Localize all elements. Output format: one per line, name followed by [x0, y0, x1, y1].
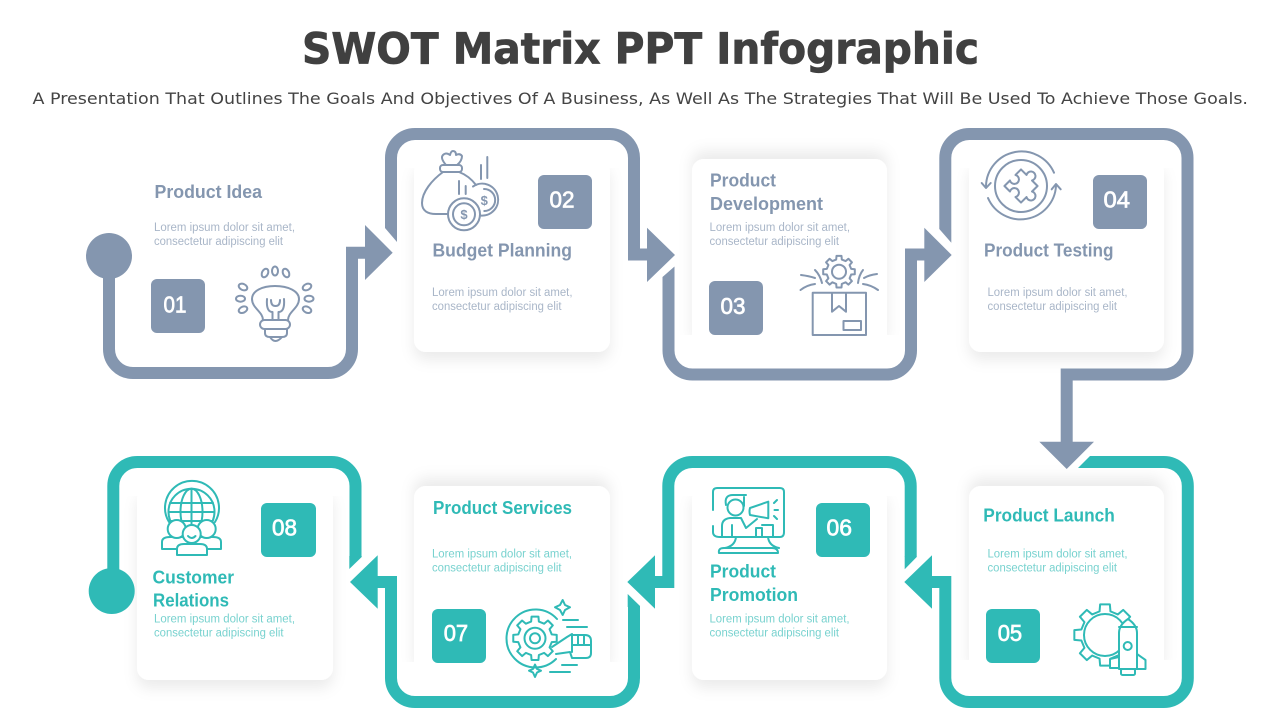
description 04: consectetur adipiscing elit	[988, 301, 1118, 313]
number badge 01: 01	[164, 292, 186, 318]
panel: step 04 Product Testing	[939, 134, 1188, 469]
icon: money bag and coins	[422, 151, 498, 230]
icon: globe with people	[162, 481, 221, 555]
description 07	[432, 549, 572, 575]
number badge 07	[432, 609, 486, 663]
description 02	[432, 287, 572, 313]
description 06: Lorem ipsum dolor sit amet,	[710, 614, 850, 626]
panel: step 08 Customer Relations	[89, 462, 362, 680]
number badge 03	[709, 281, 763, 335]
number badge 02: 02	[550, 187, 574, 213]
arrow 07	[350, 555, 378, 609]
card 08	[137, 487, 333, 680]
icon: gear with rocket	[1074, 604, 1146, 675]
number badge 06: 06	[826, 515, 852, 541]
description 05: consectetur adipiscing elit	[988, 563, 1118, 575]
connector track 04	[939, 134, 1188, 442]
connector track 05	[931, 456, 1188, 702]
heading 03	[710, 171, 823, 214]
description 08: consectetur adipiscing elit	[154, 628, 284, 640]
card 01	[137, 159, 333, 352]
heading 06: Product	[710, 562, 776, 582]
subtitle: A Presentation That Outlines The Goals And Objectives Of A Business, As Well As The Strategies That Will Be Used To Achieve Those Goals.	[32, 89, 1248, 108]
description 07: Lorem ipsum dolor sit amet,	[432, 549, 572, 561]
heading 05: Product Launch	[983, 506, 1115, 526]
title: SWOT Matrix PPT Infographic	[302, 24, 979, 74]
card 03	[692, 159, 887, 352]
icon: light bulb	[236, 266, 314, 341]
number badge 08	[261, 503, 316, 557]
heading 01: Product Idea	[154, 182, 263, 202]
heading 08: Customer	[152, 567, 234, 587]
heading 07: Product Services	[433, 498, 572, 518]
description 04	[988, 287, 1128, 313]
description 05	[988, 549, 1128, 575]
description 06	[710, 614, 850, 640]
description 08: Lorem ipsum dolor sit amet,	[154, 614, 295, 626]
description 06: consectetur adipiscing elit	[710, 628, 840, 640]
connector track 02	[385, 134, 648, 254]
arrow 06	[627, 555, 655, 609]
description 03: Lorem ipsum dolor sit amet,	[710, 222, 850, 234]
number badge 02	[538, 175, 592, 229]
arrow 03	[924, 228, 952, 282]
number badge 03: 03	[720, 293, 746, 319]
heading 03: Product	[710, 171, 776, 191]
arrow 05	[904, 555, 932, 609]
heading 06	[710, 562, 798, 605]
arrow 04	[1039, 442, 1094, 469]
card 07	[414, 486, 610, 679]
card 02	[414, 160, 610, 352]
number badge 04: 04	[1104, 187, 1130, 213]
panel: step 01 Product Idea	[86, 159, 393, 373]
description 03: consectetur adipiscing elit	[710, 236, 840, 248]
panel: step 03 Product Development	[662, 159, 952, 374]
panel: step 07 Product Services	[350, 486, 640, 702]
heading 03: Development	[710, 194, 823, 214]
icon: box with gear	[800, 256, 878, 335]
connector track 07	[377, 582, 640, 702]
card 04	[969, 160, 1164, 352]
icon: puzzle piece with cycle arrows	[982, 151, 1061, 219]
arrow 02	[647, 228, 675, 282]
panel: step 05 Product Launch	[904, 456, 1188, 702]
heading 08: Relations	[153, 591, 229, 611]
number badge 01	[151, 279, 205, 333]
connector track 06	[654, 462, 917, 582]
card 06	[692, 487, 887, 680]
heading 04: Product Testing	[984, 241, 1114, 261]
heading 08	[152, 567, 234, 611]
description 08	[154, 614, 295, 640]
icon: money bag and coins: $	[460, 207, 468, 222]
description 02: Lorem ipsum dolor sit amet,	[432, 287, 572, 299]
number badge 06	[816, 503, 870, 557]
description 04: Lorem ipsum dolor sit amet,	[988, 287, 1128, 299]
description 03	[710, 222, 850, 248]
icon: presenter on monitor with megaphone	[713, 488, 784, 553]
arrow 01	[365, 225, 393, 280]
description 01: Lorem ipsum dolor sit amet,	[154, 222, 295, 234]
number badge 08: 08	[272, 515, 297, 541]
panel: step 06 Product Promotion	[627, 462, 917, 680]
card 05	[969, 486, 1164, 679]
connector track 03	[662, 254, 925, 374]
panel: step 02 Budget Planning	[385, 134, 675, 352]
description 01	[154, 222, 295, 248]
icon: gear with fist	[507, 600, 591, 677]
connector track 01	[86, 233, 366, 373]
description 01: consectetur adipiscing elit	[154, 236, 284, 248]
number badge 07: 07	[444, 620, 468, 646]
description 05: Lorem ipsum dolor sit amet,	[988, 549, 1128, 561]
connector track 08	[89, 462, 362, 614]
number badge 05: 05	[998, 620, 1022, 646]
icon: money bag and coins: $	[481, 193, 489, 208]
description 07: consectetur adipiscing elit	[432, 563, 562, 575]
heading 06: Promotion	[710, 585, 798, 605]
number badge 05	[986, 609, 1040, 663]
description 02: consectetur adipiscing elit	[432, 301, 562, 313]
number badge 04	[1093, 175, 1147, 229]
heading 02: Budget Planning	[432, 241, 572, 261]
